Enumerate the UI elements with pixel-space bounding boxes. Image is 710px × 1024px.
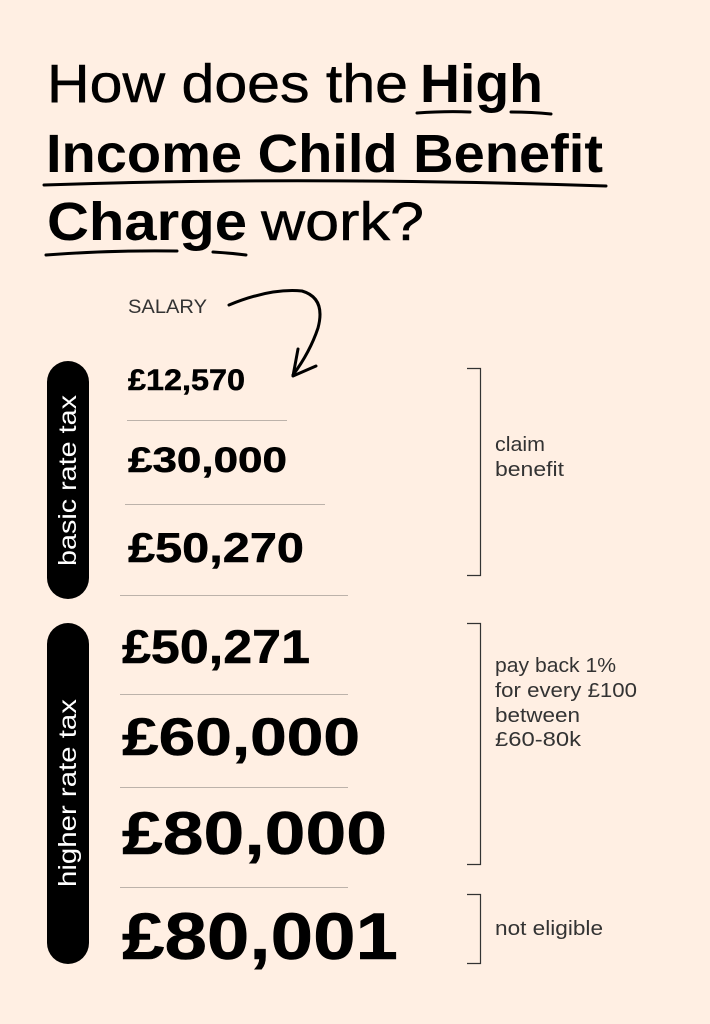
title: High xyxy=(420,54,543,114)
note: pay back xyxy=(495,655,637,751)
pill: higher rate tax: higher rate tax xyxy=(54,698,82,887)
note: pay back: between xyxy=(495,705,580,727)
salary label: SALARY xyxy=(128,297,207,318)
arrow: salary to first figure xyxy=(229,291,320,376)
figure: 80,000: £80,000 xyxy=(122,800,387,867)
note: claim benefit xyxy=(495,434,564,481)
note: claim benefit: claim xyxy=(495,434,545,456)
note: pay back: pay back 1% xyxy=(495,655,616,677)
figure: 12,570: £12,570 xyxy=(128,364,245,397)
title: Income Child Benefit xyxy=(46,124,603,184)
pill: basic rate tax xyxy=(47,361,89,599)
pill: higher rate tax xyxy=(47,623,89,964)
title: How does the xyxy=(47,54,408,114)
title: work? xyxy=(260,192,424,252)
figure: 80,001: £80,001 xyxy=(122,899,398,973)
note: claim benefit: benefit xyxy=(495,459,564,481)
note: not eligible: not eligible xyxy=(495,918,603,940)
figure: 50,271: £50,271 xyxy=(122,620,310,673)
figure: 60,000: £60,000 xyxy=(122,708,360,767)
title underlines xyxy=(44,112,606,255)
brackets xyxy=(467,368,480,964)
note: pay back: £60-80k xyxy=(495,729,582,751)
pill: basic rate tax: basic rate tax xyxy=(54,394,82,566)
note: pay back: for every £100 xyxy=(495,680,637,702)
title: Charge xyxy=(47,192,247,252)
figure: 30,000: £30,000 xyxy=(128,441,287,480)
title xyxy=(46,54,603,252)
figure: 50,270: £50,270 xyxy=(128,524,304,571)
